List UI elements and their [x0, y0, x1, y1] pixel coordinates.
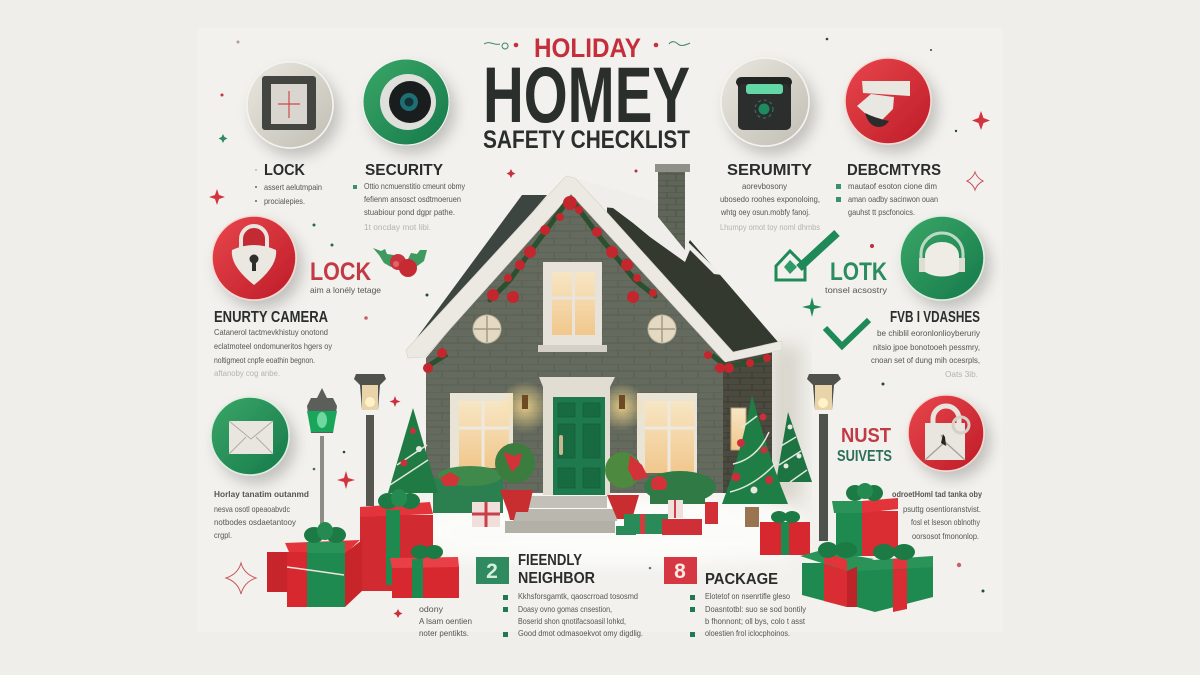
text block: friendly neighbor: 2	[486, 560, 498, 583]
text block: odroetfioml	[892, 489, 982, 541]
text block: fvb ivdashes: nitsio jpoe bonotooeh pessmry,	[873, 342, 980, 352]
callout: nust suivets: NUST	[841, 425, 891, 447]
text block: entry camera: aftanoby cog anbe.	[214, 369, 280, 378]
text block: debcmtyrs: gauhst tt pscfonoics.	[848, 207, 915, 217]
gift: small front	[390, 545, 459, 598]
text block: odroetfioml: psuttg osentioranstvist.	[903, 504, 981, 514]
text block: odroetfioml: odroetHoml tad tanka oby	[892, 489, 982, 499]
planters and greenery	[433, 443, 716, 520]
text block: holiday: Horlay tanatim outanmd	[214, 489, 309, 499]
text block: entry camera	[214, 309, 333, 378]
gable wall	[426, 188, 723, 493]
callout: lock: aim a lonély tetage	[310, 285, 381, 295]
text block: package: PACKAGE	[705, 571, 778, 588]
text block: friendly neighbor	[476, 552, 643, 638]
text block: fvb ivdashes: cnoan set of dung mih ocesrpls,	[871, 355, 980, 365]
text block: friendly neighbor: FIEENDLY	[518, 552, 582, 569]
text block: security: stuabiour pond dgpr pathe.	[364, 207, 455, 217]
title: SAFETY CHECKLIST	[483, 126, 690, 154]
door	[539, 377, 615, 495]
chimney	[655, 164, 690, 262]
icon: security camera	[363, 59, 449, 145]
text block: debcmtyrs: aman oadby sacinwon ouan	[848, 194, 938, 204]
gift: back red	[267, 552, 289, 592]
right window	[637, 393, 697, 473]
text block: debcmtyrs	[836, 162, 941, 217]
round vents	[473, 315, 676, 343]
text block: fvb ivdashes: be chiblil eoronlonlioyberuriy	[877, 328, 981, 338]
text block: holiday: notbodes osdaetantooy	[214, 517, 297, 527]
title: HOLIDAY	[534, 33, 641, 63]
garland	[423, 196, 771, 373]
callout: lotk	[825, 258, 888, 295]
title	[483, 33, 690, 154]
house illustration	[406, 164, 802, 560]
gift: tall red	[360, 489, 433, 591]
text block: security: SECURITY	[365, 162, 443, 179]
lamp post: left lantern	[354, 374, 386, 506]
text block: friendly neighbor: NEIGHBOR	[518, 570, 595, 587]
snow on roof	[568, 176, 722, 275]
text block: security: Ottio ncmuenstitio cmeunt obmy	[364, 181, 466, 191]
text block: package: oloestien frol iclocphoinos.	[705, 628, 790, 638]
text block: odroetfioml: oorsosot fmononlop.	[912, 531, 979, 541]
text block: entry camera: eclatmoteel ondomuneritos hgers oy	[214, 341, 333, 351]
right gift pile	[760, 483, 933, 612]
icon: holly	[373, 248, 427, 277]
gift: small red	[760, 511, 810, 555]
heading: lock: assert aelutmpain	[264, 182, 322, 192]
small gifts by the steps	[472, 500, 718, 535]
icon: red padlock envelope	[908, 395, 984, 471]
text block: entry camera: Catanerol tactmevkhistuy onotond	[214, 327, 328, 337]
heading: lock: LOCK	[264, 162, 305, 179]
icon: dome camera	[845, 58, 931, 144]
text block: entry camera: ENURTY CAMERA	[214, 309, 328, 326]
gift: top tall	[832, 483, 898, 556]
icon: doorbell device	[721, 58, 809, 146]
callout: lock: LOCK	[310, 258, 371, 286]
icon: green house with check	[776, 233, 837, 280]
text block: friendly neighbor: Doasy ovno gomas cnsestion,	[518, 604, 612, 614]
roof right slope	[607, 205, 778, 352]
text block: odony: A lsam oentien	[419, 616, 472, 626]
heading: lock: procialepies.	[264, 196, 305, 206]
gable window	[538, 262, 607, 352]
text block: package: Elotetof on nsenrtifle gleso	[705, 591, 790, 601]
left gift pile	[267, 489, 459, 607]
callout: lotk: tonsel acsostry	[825, 285, 888, 295]
text block: package	[664, 557, 807, 638]
text block: fvb ivdashes	[871, 309, 981, 379]
heading: lock	[255, 162, 322, 206]
text block: serumity: aorevbosony	[742, 181, 788, 191]
text block: serumity	[720, 162, 820, 232]
gift: big front	[285, 522, 362, 607]
text block: serumity: SERUMITY	[727, 162, 812, 179]
text block: package: b fhonnont; oll bys, colo t asst	[705, 616, 806, 626]
text block: holiday: crgpl.	[214, 530, 232, 540]
callout: nust suivets	[837, 425, 892, 465]
wall lamps	[499, 381, 646, 433]
icon: red padlock	[212, 216, 296, 300]
gift: bottom left	[800, 542, 874, 607]
text block: debcmtyrs: mautaof esoton cione dim	[848, 181, 937, 191]
text block: odony	[419, 604, 472, 638]
text block: holiday	[214, 489, 309, 540]
decorative sparkles and dots	[209, 38, 990, 618]
text block: friendly neighbor: Boserid shon qnotifacsoasil lohkd,	[518, 616, 626, 626]
roof left slope	[410, 195, 547, 350]
gift: bottom right	[857, 544, 933, 612]
text block: odroetfioml: fosl et lseson oblnothy	[911, 517, 981, 527]
icon: check mark	[825, 320, 869, 346]
icon: green envelope	[211, 397, 289, 475]
text block: security	[353, 162, 466, 232]
icon: green helmet lock	[900, 216, 984, 300]
callout: lotk: LOTK	[830, 258, 887, 286]
title: HOMEY	[483, 50, 690, 139]
text block: security: 1t oncday mot libi.	[364, 223, 431, 232]
text block: fvb ivdashes: Oats 3ib.	[945, 370, 978, 379]
callout: nust suivets: SUIVETS	[837, 448, 892, 465]
text block: package: Doasntotbl: suo se sod bontily	[705, 604, 807, 614]
text block: security: fefienm ansosct osdtmoeruen	[364, 194, 461, 204]
text block: serumity: ubosedo roohes exponoloing,	[720, 194, 820, 204]
lamp posts	[307, 374, 841, 541]
text block: serumity: whtg oey osun.mobfy fanoj.	[720, 207, 810, 217]
icon: lock button	[247, 62, 333, 148]
side wall	[723, 345, 772, 493]
text block: odony: odony	[419, 604, 444, 614]
text block: friendly neighbor: Good dmot odmasoekvot omy digdlig.	[518, 628, 643, 638]
text block: entry camera: noltigmeot cnpfe eoathin begnon.	[214, 355, 315, 365]
lamp post: green lantern	[307, 388, 337, 526]
left window	[450, 393, 513, 468]
roof trim	[406, 176, 782, 362]
text block: debcmtyrs: DEBCMTYRS	[847, 162, 941, 179]
text block: fvb ivdashes: FVB I VDASHES	[890, 309, 980, 326]
christmas trees	[388, 395, 812, 527]
inner paper panel	[197, 28, 1003, 632]
text block: odony: noter pentikts.	[419, 628, 469, 638]
text block: friendly neighbor: Kkhsforsgamtk, qaoscrroad tososmd	[518, 591, 638, 601]
lamp post: right lantern	[807, 374, 841, 541]
text block: serumity: Lhumpy omot toy noml dhmbs	[720, 223, 820, 232]
text block: holiday: nesva osotl opeaoabvdc	[214, 504, 291, 514]
steps	[505, 496, 617, 533]
text block: package: 8	[674, 560, 686, 583]
